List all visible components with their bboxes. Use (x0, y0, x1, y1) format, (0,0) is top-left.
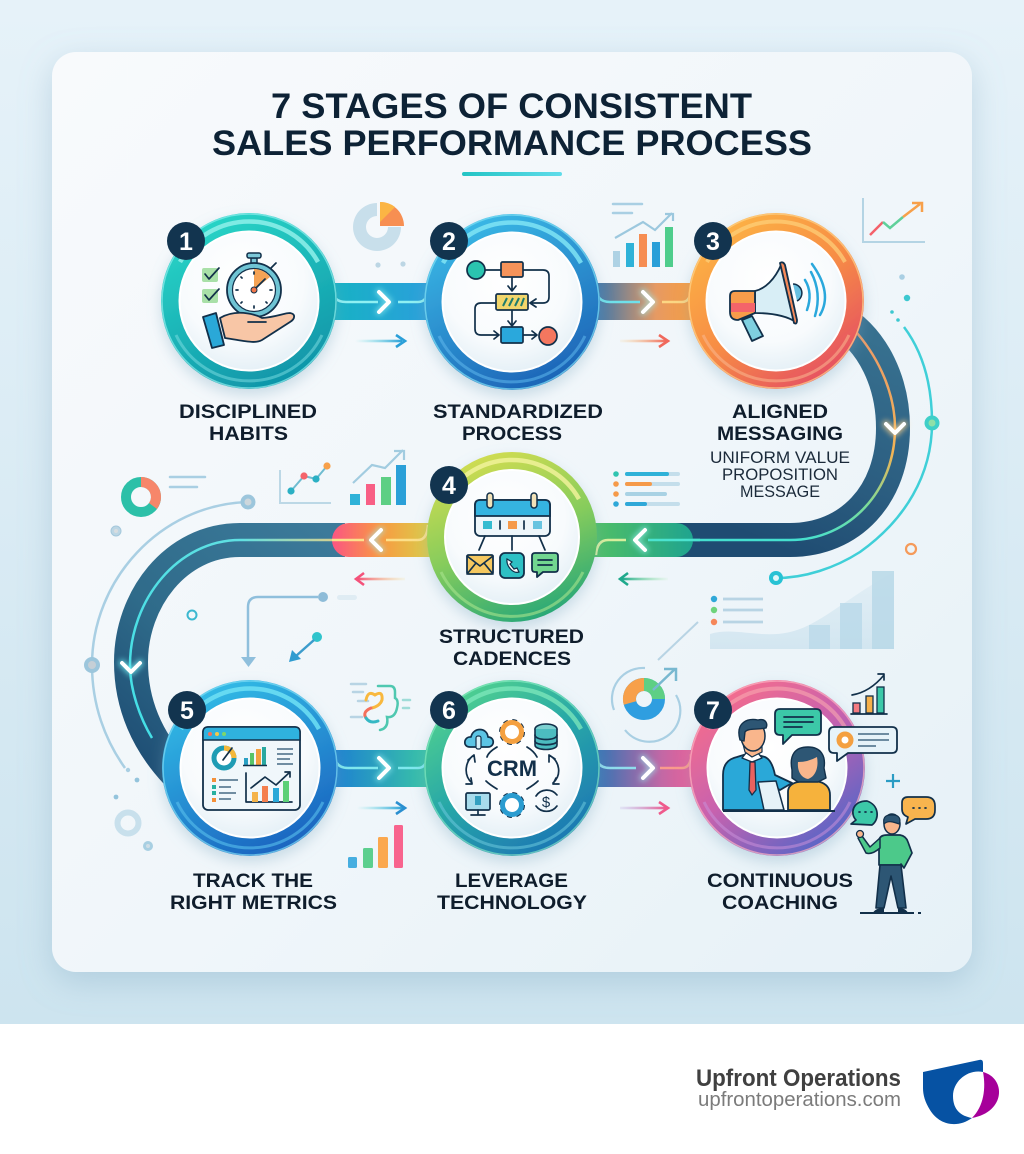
main card panel (52, 52, 972, 972)
badge 4 (430, 466, 468, 504)
serpentine band: stage 4 to 5 (130, 540, 362, 772)
stage 7 circle (689, 680, 897, 856)
icon: calendar with channels (467, 493, 558, 578)
connector 4 right (590, 523, 700, 557)
connector 2 to 3 (590, 283, 700, 320)
decoration: orange ring (906, 544, 916, 554)
label: standardized process (433, 401, 603, 445)
label: structured cadences: STRUCTURED (439, 626, 584, 648)
badge 5 (168, 691, 206, 729)
decoration: list right of stage 4 (613, 471, 680, 507)
label: structured cadences (439, 626, 584, 670)
label: continuous coaching (707, 870, 853, 914)
icon: CRM hub: $ (542, 794, 551, 811)
connector 1 to 2 (325, 283, 435, 320)
badge 1: 1 (179, 228, 193, 256)
decoration: connected scribble (351, 684, 410, 730)
badge 1 (167, 222, 205, 260)
label: track the right metrics (170, 870, 337, 914)
sublabel: uniform value proposition message: PROPOSITION (722, 465, 838, 484)
far left pale guide line (84, 494, 256, 768)
decoration: elbow arrow (241, 592, 357, 667)
decoration: scatter chart (280, 462, 331, 503)
label: leverage technology (437, 870, 587, 914)
icon: plus (886, 774, 900, 788)
footer logo (923, 1060, 999, 1124)
badge 4: 4 (442, 472, 456, 500)
label: structured cadences: CADENCES (453, 648, 571, 670)
connector 6 to 7 (590, 750, 700, 787)
label: track the right metrics: RIGHT METRICS (170, 892, 337, 914)
label: disciplined habits (179, 401, 317, 445)
badge 3 (694, 222, 732, 260)
icon: mini bar chart beside stage 7 (851, 674, 887, 714)
label: aligned messaging: MESSAGING (717, 423, 843, 445)
icon: CRM hub (465, 722, 559, 815)
badge 7: 7 (706, 697, 720, 725)
label: track the right metrics: TRACK THE (193, 870, 313, 892)
icon: stopwatch on hand with checklist (202, 253, 294, 348)
footer brand text: Upfront Operations (696, 1065, 901, 1092)
sublabel: uniform value proposition message: UNIFORM VALUE (710, 448, 850, 467)
label: leverage technology: LEVERAGE (455, 870, 568, 892)
badge 2: 2 (442, 228, 456, 256)
label: continuous coaching: COACHING (722, 892, 838, 914)
title: SALES PERFORMANCE PROCESS (212, 123, 812, 163)
stage 2 circle (424, 214, 600, 390)
label: disciplined habits: HABITS (209, 423, 288, 445)
badge 6: 6 (442, 697, 456, 725)
stage 5 circle (162, 680, 338, 856)
icon: process flowchart (467, 261, 557, 345)
label: leverage technology: TECHNOLOGY (437, 892, 587, 914)
decoration: pie chart top (353, 202, 406, 268)
decoration: bar chart top (613, 204, 673, 267)
title (212, 86, 812, 163)
decoration: line chart top right (863, 198, 925, 242)
sublabel: uniform value proposition message: MESSAGE (740, 482, 820, 501)
decoration: donut with arrow (612, 668, 680, 742)
icon: CRM hub: CRM (487, 756, 537, 781)
decoration: diagonal arrow (289, 632, 322, 662)
connector 5 to 6 (330, 750, 435, 787)
far right teal guide line (769, 327, 940, 585)
label: aligned messaging (717, 401, 843, 445)
icon: coaching conversation (723, 709, 897, 811)
stage 6 circle (424, 680, 600, 856)
badge 6 (430, 691, 468, 729)
icon: megaphone (730, 262, 825, 341)
footer band (0, 1024, 1024, 1154)
icon: metrics dashboard (203, 727, 300, 810)
footer brand text (696, 1065, 901, 1111)
decoration: dots right (890, 274, 910, 322)
label: standardized process: STANDARDIZED (433, 401, 603, 423)
stage 4 circle (427, 452, 597, 622)
badge 2 (430, 222, 468, 260)
decoration: list and area chart right (658, 571, 894, 660)
serpentine band: stage 3 to 4 (650, 318, 895, 540)
decoration: bars left of stage 4 (350, 450, 406, 505)
badge 5: 5 (180, 697, 194, 725)
badge 7 (694, 691, 732, 729)
icon: standing presenter with speech bubbles (851, 797, 935, 913)
chevrons along the path (122, 292, 904, 778)
footer brand text: upfrontoperations.com (698, 1089, 901, 1111)
small arrows under connectors (355, 335, 668, 814)
title underline (462, 172, 562, 176)
label: disciplined habits: DISCIPLINED (179, 401, 317, 423)
connector 4 left (332, 523, 440, 557)
label: aligned messaging: ALIGNED (732, 401, 828, 423)
label: standardized process: PROCESS (462, 423, 562, 445)
stage 1 circle (161, 213, 337, 389)
title: 7 STAGES OF CONSISTENT (271, 86, 752, 126)
decoration: donut left (126, 477, 205, 512)
badge 3: 3 (706, 228, 720, 256)
sublabel: uniform value proposition message (710, 448, 850, 501)
stage 3 circle (688, 213, 864, 389)
label: continuous coaching: CONTINUOUS (707, 870, 853, 892)
decoration: dots and ring bottom left (114, 768, 153, 851)
decoration: bar chart bottom (348, 825, 403, 868)
decoration: small rings left (111, 526, 196, 620)
